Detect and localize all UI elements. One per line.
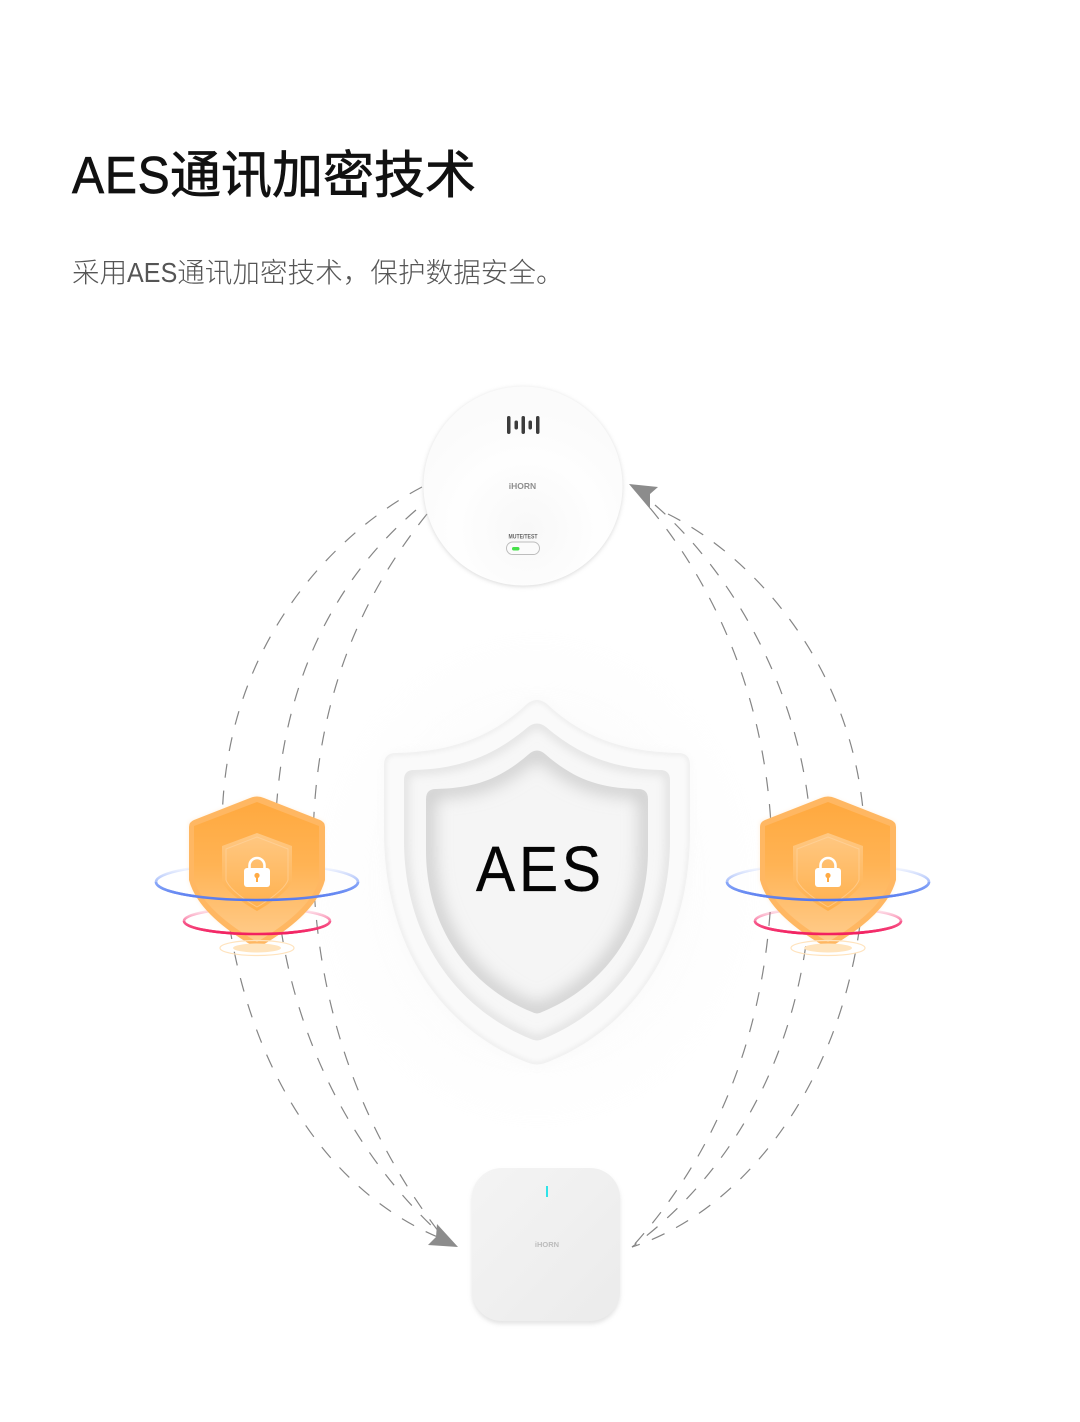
brand label: iHORN — [509, 481, 536, 491]
right lock shield — [727, 796, 929, 956]
left lock shield — [156, 796, 358, 956]
subtitle: AES — [127, 257, 178, 288]
central AES shield — [384, 700, 690, 1064]
AES label: AES — [476, 834, 605, 906]
green LED — [512, 547, 520, 550]
title: 通讯加密技术 — [170, 147, 476, 204]
title: AES — [72, 147, 170, 205]
brand label: iHORN — [535, 1240, 559, 1249]
router device — [472, 1168, 620, 1324]
smoke detector device — [424, 386, 622, 586]
mute/test label: MUTE/TEST — [508, 534, 538, 540]
arrowhead: into smoke detector — [629, 484, 658, 509]
dashed arcs right — [632, 505, 865, 1247]
diagram — [154, 386, 930, 1325]
sound slits — [507, 416, 540, 434]
subtitle: 采用 通讯加密技术，保护数据安全。 — [72, 257, 564, 288]
cyan LED — [546, 1186, 548, 1197]
arrowhead: into router — [428, 1224, 458, 1247]
test button — [506, 542, 540, 554]
dashed arcs left — [222, 487, 442, 1238]
